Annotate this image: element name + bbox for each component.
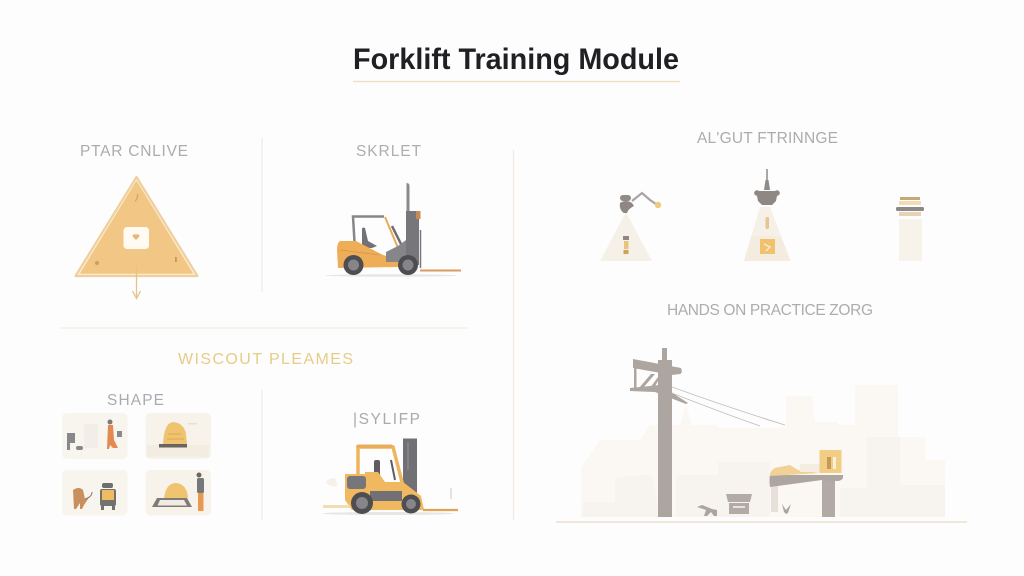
utility pole xyxy=(630,348,688,517)
card: load and standing person xyxy=(146,470,211,516)
panel: shape cards xyxy=(62,413,211,516)
icon: robotic arm with light cone xyxy=(600,193,661,261)
card: person and machine xyxy=(62,470,128,516)
icon: lamp with yellow box xyxy=(744,169,790,261)
illustration: practice zone scene xyxy=(556,348,967,523)
small plant xyxy=(782,504,791,514)
heading: SKRLET: SKRLET xyxy=(356,143,422,160)
card: gold load on pallet xyxy=(146,413,211,459)
city skyline xyxy=(581,385,945,517)
platform with yellow cabin xyxy=(770,450,843,517)
icon: forklift side view xyxy=(325,184,461,277)
icon: yellow forklift xyxy=(322,438,458,515)
heading: HANDS ON PRACTICE ZORG: HANDS ON PRACTICE ZORG xyxy=(667,302,873,319)
power lines xyxy=(672,387,785,426)
crate xyxy=(726,494,752,514)
card: worker and letter xyxy=(62,413,128,459)
heading: AUGUT FTRINNGE: AL'GUT FTRINNGE xyxy=(697,130,838,147)
ground line xyxy=(556,521,967,523)
heading: WISCOUT PLEAMES: WISCOUT PLEAMES xyxy=(178,351,353,368)
icon: warning triangle xyxy=(76,177,198,298)
small animal figure xyxy=(697,505,717,516)
title: Forklift Training Module xyxy=(353,43,679,76)
arrow: down xyxy=(132,266,140,298)
heading: ISYLIFF: |SYLIFP xyxy=(353,411,420,428)
icon: column xyxy=(896,197,924,261)
heading: SHAPE: SHAPE xyxy=(107,392,164,409)
heading: PTAR CNLIVE: PTAR CNLIVE xyxy=(80,143,188,160)
